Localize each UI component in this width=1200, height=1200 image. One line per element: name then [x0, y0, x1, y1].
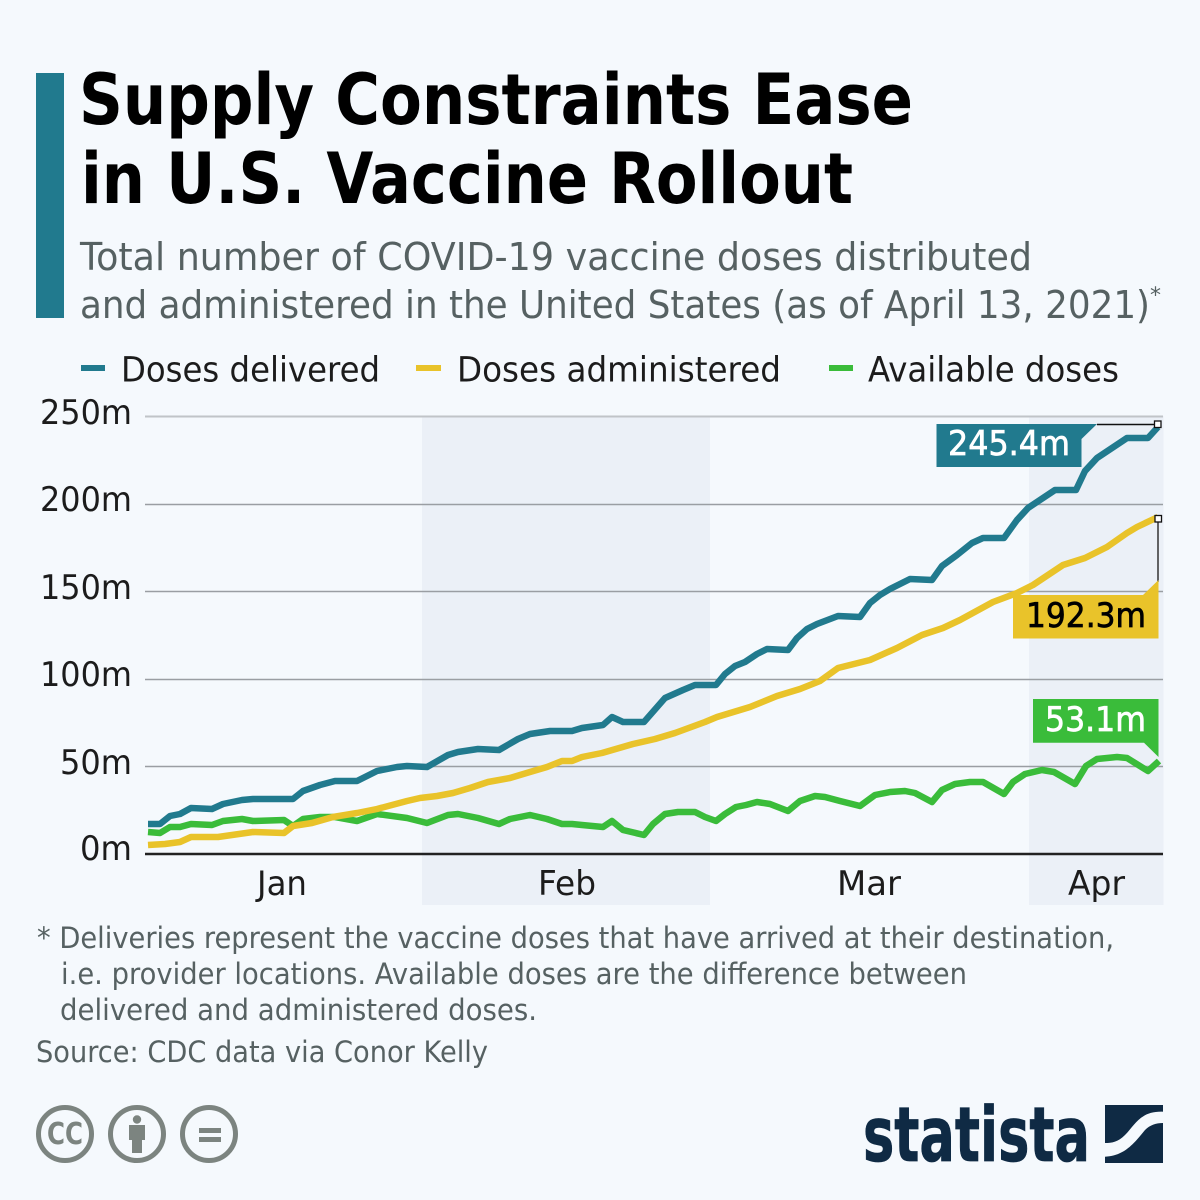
y axis labels: 200m: [40, 480, 132, 520]
y axis labels: 50m: [60, 743, 132, 783]
x axis month labels: Apr: [1068, 864, 1125, 904]
title: [79, 59, 913, 220]
statista logo mark: [1105, 1105, 1163, 1163]
icon: no derivatives: [182, 1108, 236, 1160]
source: Source: CDC data via Conor Kelly: [36, 1035, 488, 1069]
callout: doses administered 192.3m: 192.3m: [1026, 596, 1146, 636]
title: Supply Constraints Ease: [79, 59, 913, 141]
statista wordmark: statista: [863, 1090, 1090, 1179]
callout: doses administered 192.3m: [1013, 516, 1162, 638]
subtitle: Total number of COVID-19 vaccine doses distributed: [79, 235, 1032, 279]
x axis month labels: Jan: [255, 864, 307, 904]
x axis month labels: Mar: [837, 864, 901, 904]
y axis labels: 150m: [40, 568, 132, 608]
footnote: * Deliveries represent the vaccine doses that have arrived at their destination,: [37, 921, 1114, 955]
x axis month labels: Feb: [538, 864, 596, 904]
line: doses administered: [148, 517, 1158, 845]
y axis labels: [40, 393, 132, 869]
legend: doses administered: Doses administered: [457, 350, 781, 390]
callout: available doses 53.1m: [1033, 699, 1158, 757]
subtitle: *: [1150, 283, 1161, 307]
icon: creative commons: [38, 1108, 92, 1160]
icon: creative commons: CC: [47, 1117, 83, 1152]
title accent bar: [36, 73, 64, 318]
month band: Apr: [1029, 416, 1164, 905]
footnote: [37, 921, 1114, 1027]
title: in U.S. Vaccine Rollout: [81, 138, 853, 220]
legend: [81, 350, 1119, 390]
icon: attribution: [110, 1108, 164, 1160]
legend: doses delivered: Doses delivered: [121, 350, 380, 390]
y axis labels: 250m: [40, 393, 132, 433]
callout: doses delivered 245.4m: 245.4m: [948, 424, 1070, 464]
month band: Feb: [422, 416, 710, 905]
subtitle: and administered in the United States (as of April 13, 2021): [80, 283, 1150, 327]
line chart: [40, 393, 1164, 905]
x axis baseline: [145, 853, 1163, 855]
legend: available doses: Available doses: [868, 350, 1119, 390]
subtitle: [79, 235, 1161, 327]
y axis labels: 100m: [40, 655, 132, 695]
y axis labels: 0m: [80, 829, 132, 869]
footnote: i.e. provider locations. Available doses are the difference between: [61, 957, 967, 991]
callout: doses delivered 245.4m: [936, 421, 1161, 467]
x axis month labels: [255, 864, 1125, 904]
line: available doses: [148, 757, 1159, 835]
callout: available doses 53.1m: 53.1m: [1045, 700, 1146, 740]
line: doses delivered: [148, 427, 1158, 824]
footnote: delivered and administered doses.: [60, 993, 537, 1027]
